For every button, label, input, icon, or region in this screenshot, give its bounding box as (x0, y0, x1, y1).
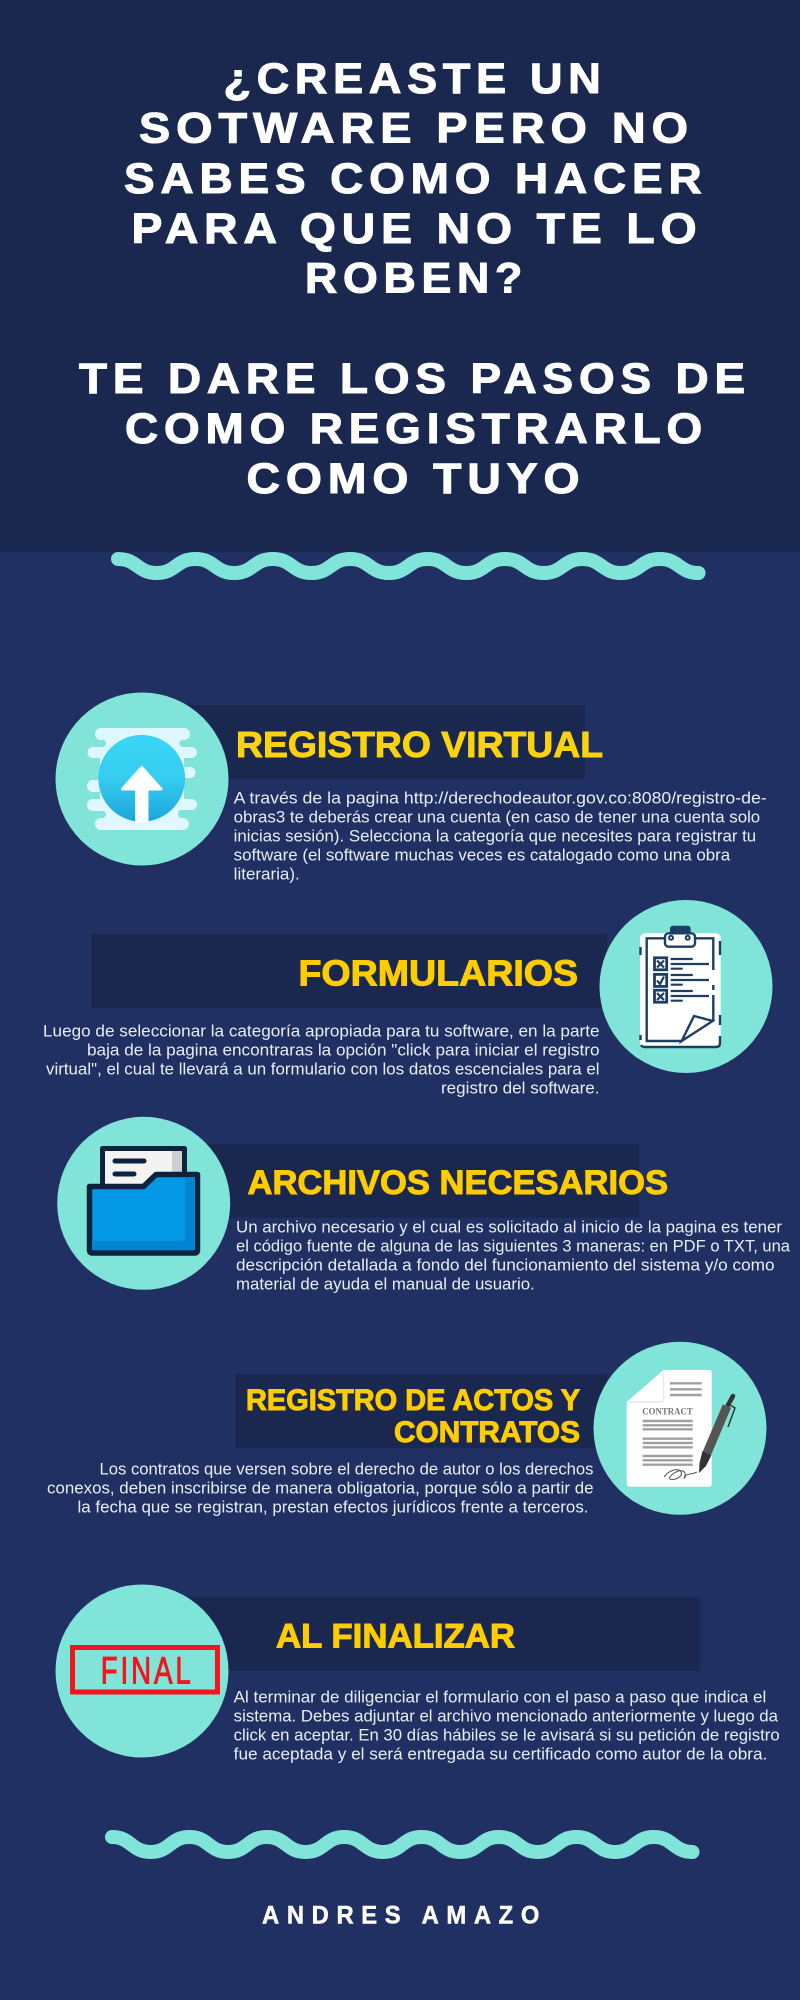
header panel (0, 0, 800, 552)
text block: el código fuente de alguna de las siguientes 3 maneras: en PDF o TXT, una (236, 1238, 791, 1256)
heading: REGISTRO VIRTUAL (236, 724, 603, 765)
icon: folder (57, 1117, 230, 1290)
heading: CONTRATOS (394, 1416, 580, 1449)
panel: registro virtual (56, 692, 767, 883)
heading: FORMULARIOS (298, 952, 578, 994)
icon: final stamp: FINAL (101, 1650, 194, 1692)
text block (234, 789, 767, 883)
text block: Luego de seleccionar la categoría apropiada para tu software, en la parte (43, 1023, 600, 1041)
heading bar (140, 705, 585, 779)
title (79, 55, 751, 503)
text block: A través de la pagina http://derechodeautor.gov.co:8080/registro-de- (234, 789, 767, 807)
text block: obras3 te deberás crear una cuenta (en caso de tener una cuenta solo (234, 808, 760, 826)
top wave divider (118, 559, 699, 573)
panel: archivos necesarios (57, 1117, 791, 1294)
panel: registro de actos y contratos (47, 1342, 766, 1517)
bottom wave divider (112, 1837, 693, 1852)
author name: ANDRES AMAZO (262, 1901, 547, 1929)
text block: click en aceptar. En 30 días hábiles se le avisará si su petición de registro (234, 1727, 780, 1745)
title: TE DARE LOS PASOS DE (79, 355, 751, 403)
heading (246, 1384, 580, 1449)
text block (234, 1689, 780, 1764)
text block: conexos, deben inscribirse de manera obligatoria, porque sólo a partir de (47, 1480, 594, 1498)
heading: AL FINALIZAR (276, 1617, 515, 1655)
heading bar (91, 934, 607, 1008)
text block: software (el software muchas veces es catalogado como una obra (234, 846, 731, 864)
title: COMO TUYO (246, 455, 586, 503)
text block (236, 1219, 791, 1294)
text block: la fecha que se registran, prestan efectos jurídicos frente a terceros. (78, 1499, 588, 1517)
title: ¿CREASTE UN (224, 55, 606, 103)
text block: fue aceptada y el será entregada su certificado como autor de la obra. (234, 1746, 767, 1764)
text block: baja de la pagina encontraras la opción "click para iniciar el registro (87, 1042, 600, 1060)
text block: Al terminar de diligenciar el formulario con el paso a paso que indica el (234, 1689, 766, 1707)
title: SABES COMO HACER (124, 155, 708, 203)
text block (43, 1023, 600, 1098)
title: PARA QUE NO TE LO (132, 205, 702, 253)
heading: REGISTRO DE ACTOS Y (246, 1384, 580, 1417)
heading bar (140, 1144, 639, 1218)
heading bar (140, 1597, 700, 1671)
title: COMO REGISTRARLO (125, 405, 708, 453)
text block: descripción detallada a fondo del funcionamiento del sistema y/o como (236, 1257, 774, 1275)
icon: final stamp (56, 1584, 228, 1758)
text block: sistema. Debes adjuntar el archivo mencionado anteriormente y luego da (234, 1708, 779, 1726)
text block: material de ayuda el manual de usuario. (236, 1276, 535, 1294)
panel: formularios (43, 900, 772, 1098)
panel: al finalizar (56, 1584, 780, 1764)
text block (47, 1461, 594, 1517)
heading: ARCHIVOS NECESARIOS (248, 1164, 668, 1202)
text block: inicias sesión). Selecciona la categoría que necesites para registrar tu (234, 827, 756, 845)
text block: registro del software. (441, 1080, 600, 1098)
icon: contract (594, 1342, 766, 1515)
text block: Los contratos que versen sobre el derecho de autor o los derechos (100, 1461, 594, 1479)
text block: literaria). (234, 865, 300, 883)
title: ROBEN? (305, 254, 528, 302)
title: SOTWARE PERO NO (139, 104, 694, 152)
text block: virtual", el cual te llevará a un formulario con los datos escenciales para el (46, 1061, 600, 1079)
heading bar (235, 1374, 607, 1448)
icon: clipboard (600, 900, 772, 1073)
icon: upload (56, 692, 228, 866)
text block: Un archivo necesario y el cual es solicitado al inicio de la pagina es tener (236, 1219, 783, 1237)
icon: contract: CONTRACT (642, 1406, 693, 1416)
